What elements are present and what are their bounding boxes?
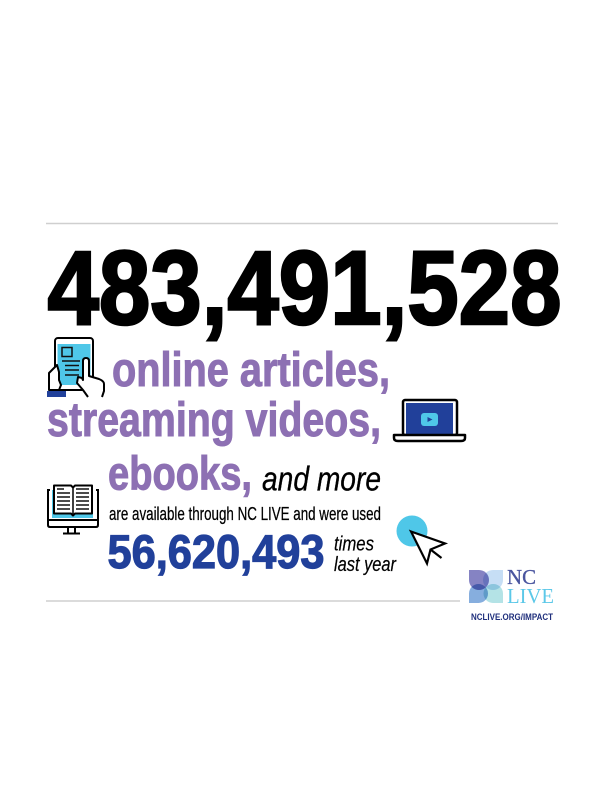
text: times last year: last year xyxy=(334,554,397,576)
text: times last year: times xyxy=(334,534,374,556)
logo url: NCLIVE.ORG/IMPACT xyxy=(471,612,553,623)
text: streaming videos: streaming videos, xyxy=(47,394,381,447)
logo: NC LIVE: LIVE xyxy=(507,584,554,608)
text: times last year xyxy=(334,534,397,576)
icon: laptop xyxy=(394,400,465,441)
logo: NC LIVE: NC xyxy=(507,565,536,589)
text: online articles: online articles, xyxy=(112,344,390,397)
icon: cursor click xyxy=(396,516,445,564)
text: ebooks: ebooks, xyxy=(108,446,252,500)
text: are available through NC LIVE: are available through NC LIVE and were used xyxy=(109,504,381,524)
icon: book on monitor xyxy=(48,486,98,534)
text: and more: and more xyxy=(262,460,381,498)
icon: tablet with hand xyxy=(47,338,104,397)
logo: NC LIVE xyxy=(469,565,554,608)
usage number: 56,620,493 xyxy=(108,525,324,578)
